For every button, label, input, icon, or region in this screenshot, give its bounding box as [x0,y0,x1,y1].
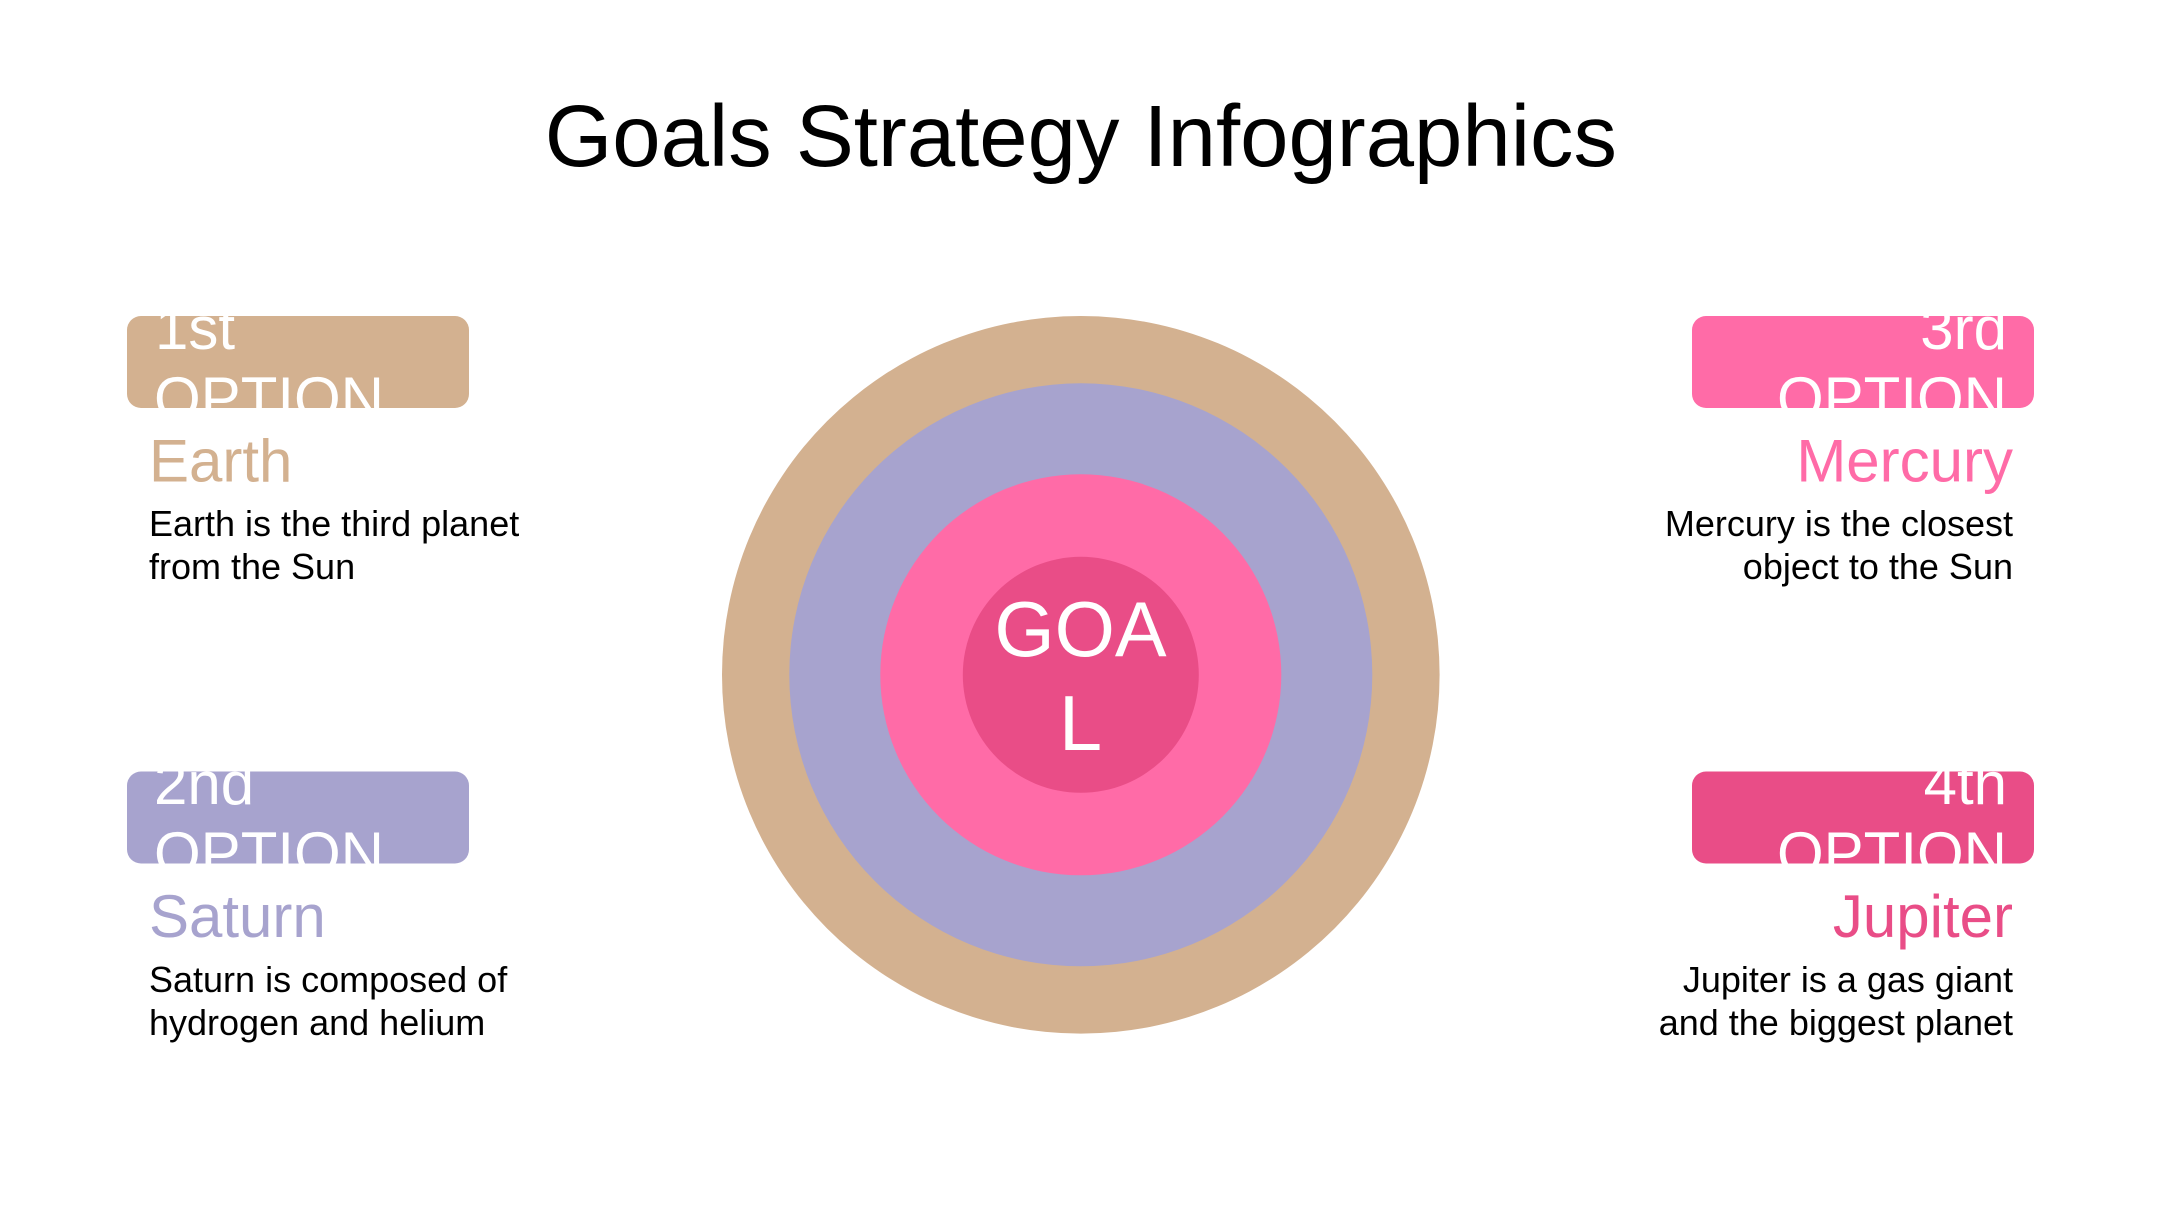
text: Mercury description: Mercury is the closest [1665,503,2013,544]
panel: 4th option Jupiter [1659,750,2034,1043]
heading: Earth: Earth [149,428,292,494]
text: Saturn description: hydrogen and helium [149,1002,485,1043]
text: Saturn description: Saturn is composed of [149,959,508,1000]
panel: concentric goal target [722,316,1440,1034]
badge: 2nd option: 2nd [154,750,254,817]
badge: 2nd option: OPTION [154,820,384,887]
ring: outer tan [722,316,1440,1034]
text: Jupiter description: and the biggest planet [1659,1002,2013,1043]
infographic canvas [127,102,2034,1042]
text: Mercury description: object to the Sun [1743,546,2013,587]
center label: GOAL: GOA [994,587,1167,673]
ring: pink [880,474,1281,875]
badge: 3rd option: 3rd [1920,295,2007,362]
badge: 3rd option [1692,316,2034,408]
badge: 1st option [127,316,469,408]
badge: 4th option [1692,772,2034,864]
heading: Jupiter: Jupiter [1833,883,2013,950]
center label: GOAL: L [1059,681,1102,767]
panel: 2nd option Saturn [127,750,508,1043]
heading: Mercury: Mercury [1796,428,2013,494]
badge: 4th option: OPTION [1777,820,2007,887]
ring: center dark pink [963,557,1199,793]
text: Earth description: Earth is the third planet [149,503,519,544]
title: Goals Strategy Infographics [545,88,1617,185]
badge: 1st option: OPTION [154,365,384,432]
badge: 2nd option [127,772,469,864]
badge: 4th option: 4th [1924,750,2007,817]
badge: 1st option: 1st [155,295,235,362]
ring: lavender [789,383,1372,966]
text: Earth description: from the Sun [149,546,355,587]
badge: 3rd option: OPTION [1777,365,2007,432]
text: Jupiter description: Jupiter is a gas giant [1683,959,2013,1000]
heading: Saturn: Saturn [149,883,326,950]
panel: 3rd option Mercury [1665,295,2034,587]
panel: 1st option Earth [127,295,519,587]
